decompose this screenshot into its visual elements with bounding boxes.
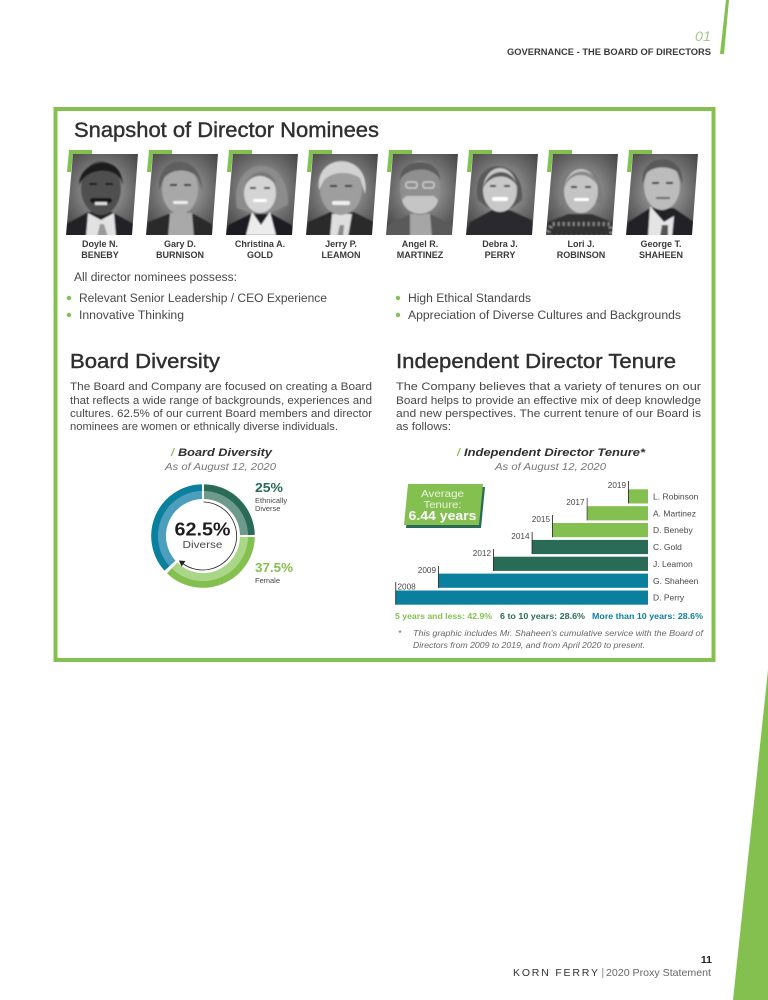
director names: Jerry P.	[325, 239, 357, 249]
heading: board diversity: Board Diversity	[70, 351, 220, 373]
donut chart	[155, 480, 293, 585]
bar: A. Martinez: 2017	[566, 498, 585, 507]
director portrait: George T. Shaheen	[626, 150, 698, 235]
bar: J. Leamon: J. Leamon	[653, 559, 693, 569]
chart title: tenure: /	[456, 447, 462, 459]
director names: Doyle N.	[82, 239, 118, 249]
director names: Gary D.	[164, 239, 196, 249]
qualifications intro: All director nominees possess:	[74, 272, 237, 284]
director names: ROBINSON	[557, 250, 605, 260]
footnote: Directors from 2009 to 2019, and from April 2020 to present.	[413, 640, 645, 650]
director names: LEAMON	[322, 250, 360, 260]
callout: average tenure: Tenure:	[424, 499, 462, 511]
text block: tenure: The Company believes that a variety of tenures on our	[396, 381, 701, 393]
bar: J. Leamon	[473, 549, 693, 571]
donut centre value: 62.5%	[174, 518, 230, 540]
bar: D. Perry	[395, 582, 685, 605]
director portrait: Debra J. Perry	[466, 150, 538, 235]
title: Snapshot of Director Nominees	[74, 119, 379, 142]
director portrait: Gary D. Burnison	[146, 150, 218, 235]
legend: female	[255, 560, 293, 585]
callout: average tenure: 6.44 years	[408, 509, 477, 523]
text block: tenure: as follows:	[396, 421, 451, 433]
bar: L. Robinson: 2019	[608, 481, 626, 490]
text block: board diversity: that reflects a wide range of backgrounds, experiences and	[70, 395, 372, 407]
director portrait: Doyle N. Beneby	[66, 150, 138, 235]
text block: tenure	[396, 381, 702, 433]
tenure legend: More than 10 years: 28.6%	[592, 611, 703, 621]
qualifications list: Appreciation of Diverse Cultures and Backgrounds	[408, 310, 681, 322]
circular arrow	[182, 502, 237, 570]
chart subtitle: tenure: As of August 12, 2020	[494, 461, 606, 473]
bar: D. Beneby: 2015	[532, 515, 550, 524]
outer dark ring segments	[155, 488, 251, 584]
bar: L. Robinson	[608, 481, 699, 504]
legend: female: Female	[255, 576, 280, 585]
bar: G. Shaheen	[418, 566, 699, 588]
text block: board diversity: cultures. 62.5% of our current Board members and director	[70, 408, 372, 420]
footer: company and document: 2020 Proxy Statement	[606, 967, 711, 979]
callout: average tenure: Average	[421, 488, 464, 500]
legend: female: 37.5%	[255, 560, 293, 575]
footnote: This graphic includes Mr. Shaheen's cumulative service with the Board of	[413, 628, 705, 638]
director names: PERRY	[485, 250, 515, 260]
legend: ethnically diverse: Diverse	[255, 504, 280, 513]
bar: D. Perry: D. Perry	[653, 593, 685, 603]
bar chart: director tenure	[395, 481, 699, 605]
bar: J. Leamon: 2012	[473, 549, 491, 558]
page number: 11	[701, 954, 712, 966]
director portrait: Christina A. Gold	[226, 150, 298, 235]
footnote: *	[398, 628, 402, 638]
tenure legend	[395, 611, 703, 621]
director names: Debra J.	[482, 239, 518, 249]
bar: C. Gold: C. Gold	[653, 542, 682, 552]
section number: 01	[695, 28, 711, 44]
tenure legend: 6 to 10 years: 28.6%	[500, 611, 585, 621]
director names: Lori J.	[567, 239, 595, 249]
director names: GOLD	[247, 250, 273, 260]
heading: independent director tenure: Independent Director Tenure	[396, 351, 676, 373]
footer: company and document: KORN FERRY	[513, 967, 598, 979]
bar: L. Robinson: L. Robinson	[653, 492, 699, 502]
director portrait: Lori J. Robinson	[546, 150, 618, 235]
panel: director nominees frame	[56, 109, 714, 660]
bar: C. Gold	[511, 532, 682, 554]
bar: A. Martinez	[566, 498, 696, 520]
top accent slash	[720, 0, 729, 54]
director names: George T.	[640, 239, 682, 249]
text block: tenure: Board helps to provide an effective mix of deep knowledge	[396, 395, 701, 407]
text block: board diversity: The Board and Company are focused on creating a Board	[70, 381, 372, 393]
qualifications list	[67, 293, 681, 322]
director portrait: Angel R. Martinez	[386, 150, 458, 235]
legend: ethnically diverse	[255, 480, 287, 513]
callout: average tenure	[404, 484, 485, 528]
director names: BENEBY	[81, 250, 119, 260]
donut centre label: Diverse	[182, 539, 223, 551]
decorative green wedge	[733, 670, 768, 1000]
bar: A. Martinez: A. Martinez	[653, 508, 696, 518]
bar: D. Beneby: D. Beneby	[653, 525, 693, 535]
footer: company and document	[513, 967, 711, 979]
chart subtitle: board diversity: As of August 12, 2020	[164, 461, 276, 473]
text block: board diversity: nominees are women or ethnically diverse individuals.	[70, 421, 338, 433]
tenure legend: 5 years and less: 42.9%	[395, 611, 492, 621]
director names	[81, 239, 683, 260]
bar: G. Shaheen: 2009	[418, 566, 436, 575]
chart title: board diversity: Board Diversity	[178, 447, 273, 459]
legend: ethnically diverse: 25%	[255, 480, 283, 495]
director names: SHAHEEN	[639, 250, 683, 260]
section heading: GOVERNANCE - THE BOARD OF DIRECTORS	[507, 47, 711, 57]
legend: ethnically diverse: Ethnically	[255, 496, 287, 505]
footnote	[398, 628, 705, 650]
chart title: board diversity: /	[170, 447, 176, 459]
director names: Christina A.	[235, 239, 285, 249]
inner light ring segments	[162, 495, 244, 577]
director names: MARTINEZ	[397, 250, 444, 260]
qualifications list: High Ethical Standards	[408, 293, 531, 305]
bar: D. Beneby	[532, 515, 693, 537]
chart title: tenure: Independent Director Tenure*	[464, 447, 646, 459]
director names: Angel R.	[402, 239, 438, 249]
text block: board diversity	[70, 381, 372, 433]
bar: G. Shaheen: G. Shaheen	[653, 576, 699, 586]
qualifications list: Innovative Thinking	[79, 310, 184, 322]
qualifications list: Relevant Senior Leadership / CEO Experience	[79, 293, 327, 305]
bar: D. Perry: 2008	[398, 582, 416, 592]
director portrait: Jerry P. Leamon	[306, 150, 378, 235]
bar: C. Gold: 2014	[511, 532, 530, 541]
director names: BURNISON	[156, 250, 204, 260]
text block: tenure: and new perspectives. The current tenure of our Board is	[396, 408, 702, 420]
